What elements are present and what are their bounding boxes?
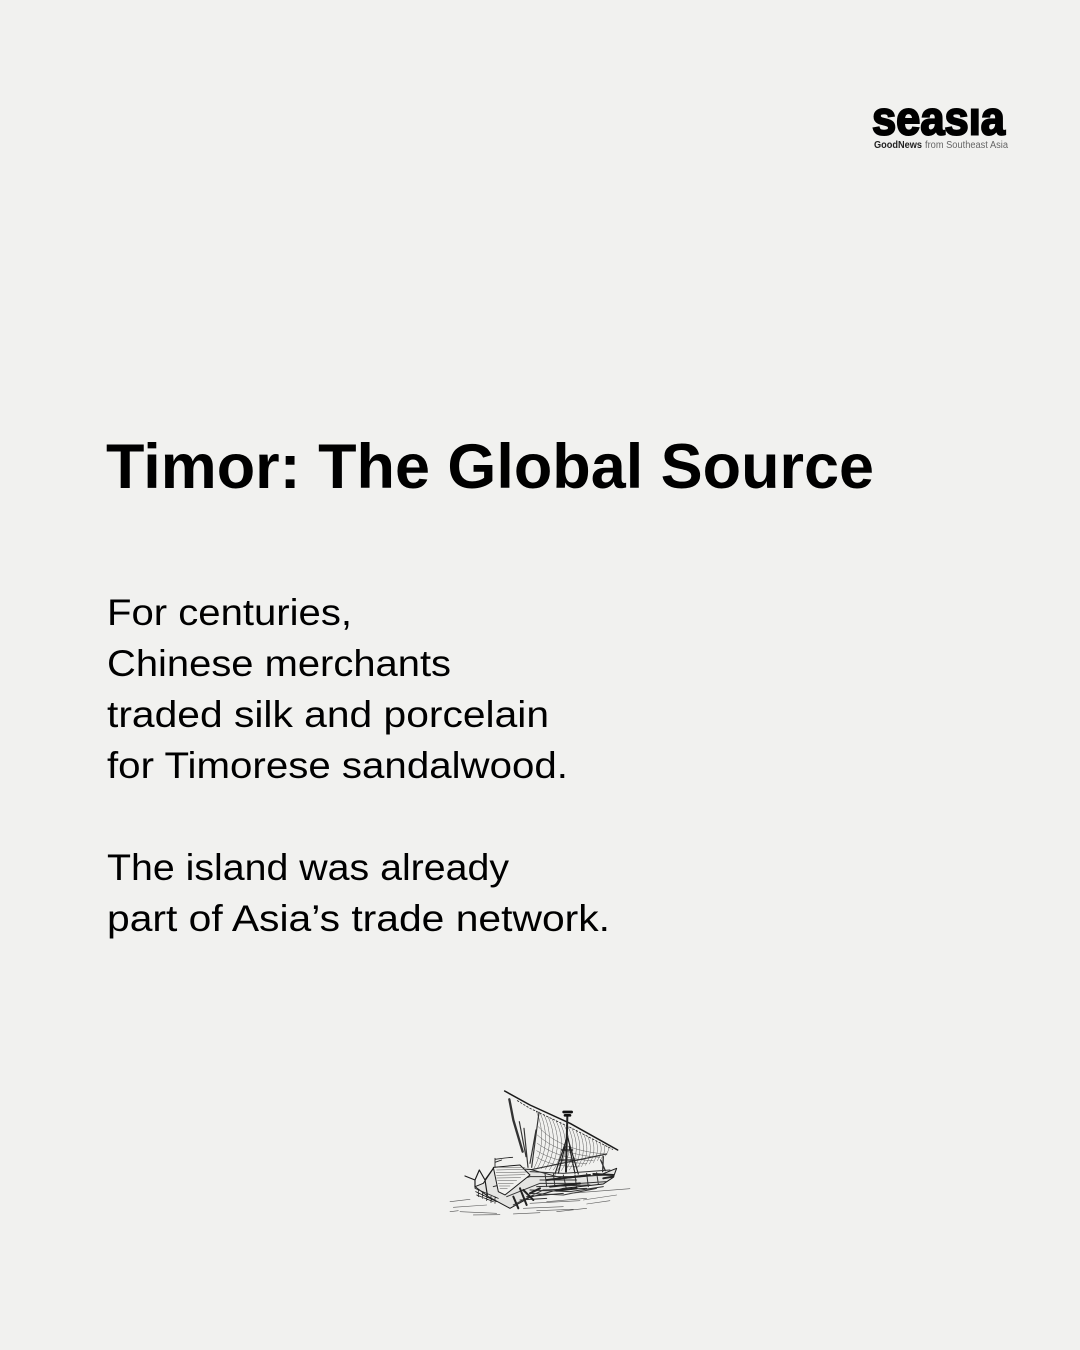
logo wordmark: seasia [872,92,1006,144]
title: Timor: The Global Source [106,432,874,502]
stern lattice [475,1188,498,1203]
icon: sailing ship illustration [450,1091,630,1215]
waves [450,1189,630,1215]
yard and sail edge [505,1091,618,1150]
text block: trade network: The island was already [107,847,510,888]
hull planking and oars [493,1170,610,1205]
text block: Chinese trade: for Timorese sandalwood. [107,745,568,786]
text block: trade network: part of Asia’s trade network. [107,898,610,939]
text block: trade network [107,847,610,939]
stern cabin [493,1165,530,1195]
flag [495,1157,513,1167]
mast and crow's nest [566,1117,567,1172]
logo tagline regular: from Southeast Asia [925,140,1008,151]
text block: Chinese trade [107,592,568,786]
text block: Chinese trade: traded silk and porcelain [107,694,549,735]
logo: seasia [872,108,1008,148]
cabin roof hatching [496,1167,528,1189]
text block: Chinese trade: For centuries, [107,592,352,633]
hull [475,1168,617,1208]
sail shading [534,1111,609,1171]
logo tagline bold: GoodNews [874,140,922,151]
text block: Chinese trade: Chinese merchants [107,643,451,684]
